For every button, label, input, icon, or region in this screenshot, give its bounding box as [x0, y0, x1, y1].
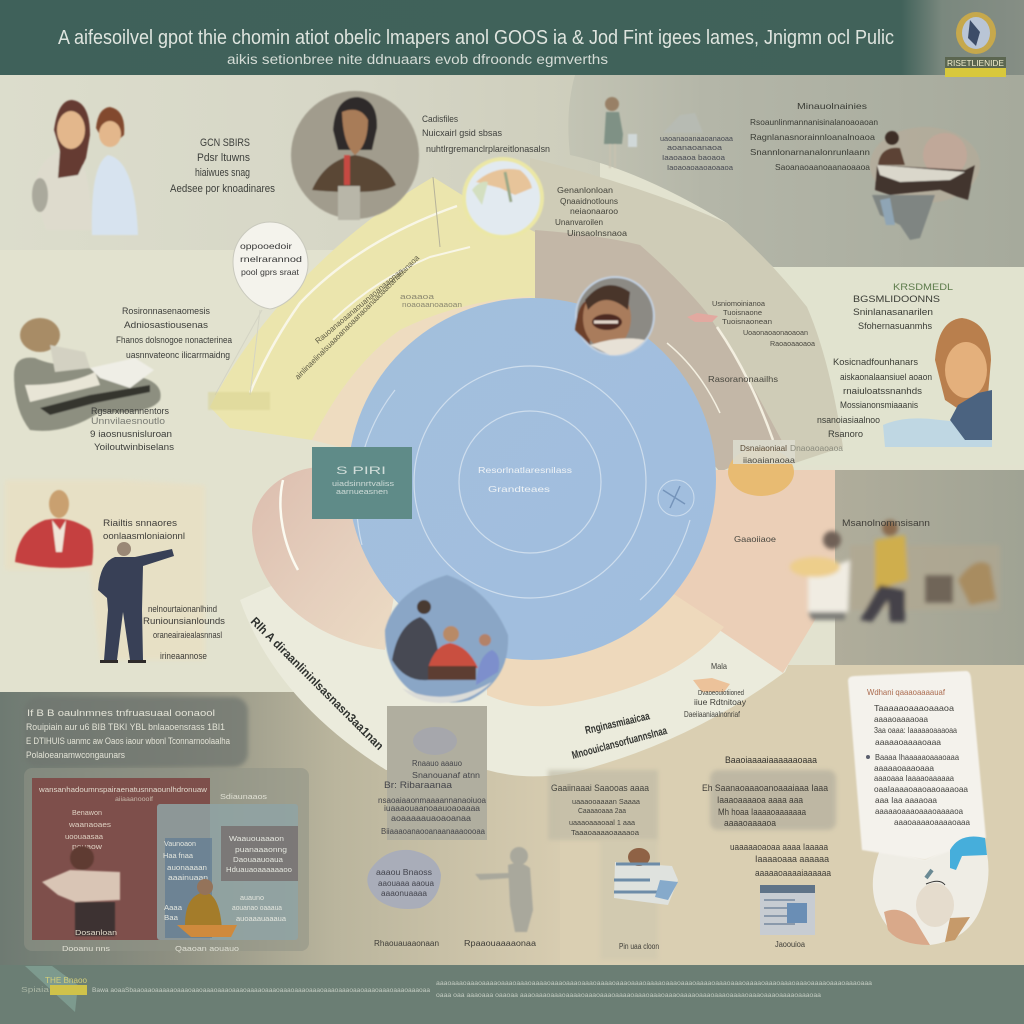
- panel: bottom-left text block: E DTIHUIS uanmc aw Oaos iaour wbonl Tconnarnoolaalha: [26, 736, 230, 746]
- card: maroon: wansanhadoumnspairaenatusnnaounlhdronuaw: [38, 785, 208, 794]
- figure: person at notebook, left: [14, 318, 161, 431]
- portrait: woman, right: [883, 318, 992, 447]
- panel: centre column below group portrait: [387, 690, 487, 840]
- text: upper centre notes: neiaonaaroo: [570, 207, 619, 216]
- text block: centre column: iuaaaouaanoaauoaoaaaa: [384, 804, 481, 813]
- text: top centre note: Nuicxairl gsid sbsas: [422, 128, 502, 139]
- text and icon: lower right band: Dvaoeouiotiioned: [698, 690, 744, 697]
- text block: centre column: nsaoaiaaonmaaaannanaoiuoa: [378, 796, 487, 805]
- panel: white note card with callout, right: [848, 671, 988, 945]
- text: top centre note: Cadisfiles: [422, 114, 458, 125]
- text: note card: aaaaaoaaaoaaa: [874, 763, 934, 773]
- panel: grey column with note: uaaaoaaaoaal 1 aaa: [569, 820, 635, 827]
- ring segment: peach crescent: [312, 296, 535, 450]
- speech balloon: oppooedoir: [240, 241, 292, 251]
- panel: grey centre note: uaaaaaoaoaa aaaa Iaaaaa: [730, 842, 828, 852]
- figure: reader at desk: [870, 127, 980, 240]
- teal card: uiadsinnrtvaliss: [332, 479, 394, 488]
- icon: bullet: [866, 755, 870, 759]
- text: note card: aaaoaaaaoaaaaoaaa: [894, 817, 970, 827]
- background region: bottom right: [480, 665, 1024, 965]
- text block: centre column: Rnaauo aaauo: [412, 759, 463, 768]
- panel: grey centre note: aaaaoaaaaoa: [724, 818, 776, 828]
- yellow segment label highlight: [208, 392, 270, 410]
- text: right list: Sninlanasanarilen: [853, 307, 933, 317]
- white arcs: right side: [667, 327, 773, 440]
- panel: bottom-left text block: Polaloeanamwcongaunars: [26, 750, 125, 760]
- top right figure and notes: [604, 97, 980, 240]
- icon: egg and hands: [884, 870, 970, 945]
- text: right list: aiskaonalaansiuel aoaon: [840, 372, 932, 382]
- text: group heading: Msanolnomnsisann: [842, 518, 930, 529]
- text: beside standing man: Runiounsianlounds: [143, 616, 226, 626]
- text: right of disc, segments: Uoaonaoaonaoaoan: [743, 328, 808, 337]
- text: upper centre notes: [555, 186, 628, 238]
- card: maroon: pouaow: [72, 842, 103, 851]
- speech balloon: [233, 222, 308, 309]
- text: upper centre notes: Genanlonloan: [557, 186, 613, 195]
- figure: standing man in suit: [98, 542, 174, 663]
- caption row: Rhaouauaaonaan: [374, 939, 439, 948]
- panel: grey column with note: Caaaaoaaa 2aa: [578, 808, 626, 815]
- text: right of disc, segments: [708, 299, 843, 544]
- text: note card: [867, 687, 970, 827]
- text: beside standing man: [143, 604, 226, 661]
- logo badge: [945, 12, 1006, 77]
- text: yellow segment curved labels: ainlinaelinalsuaaoanaoaanaoanaaoaaoanaoanaoa: [293, 253, 421, 381]
- text: beside standing man: nelnourtaionanlhind: [148, 604, 217, 614]
- teal card: S PIRI: [336, 465, 386, 477]
- card: blue-grey: Hduauaoaaaaaaoo: [226, 867, 292, 874]
- ring segment: pink left: [252, 466, 400, 650]
- white arc: pink segment: [280, 480, 298, 570]
- figure: man in red, left: [15, 490, 93, 568]
- ring segment: peach lower right: [660, 470, 835, 673]
- text: right of disc, segments: iiaoaianaoaa: [743, 455, 795, 465]
- white arcs: yellow segment: [215, 177, 470, 395]
- text: left paragraphs: Unnvilaesnoutlo: [91, 416, 165, 426]
- panel: grey centre note: Baaoiaaaaiaaaaaaoaaa: [725, 755, 818, 766]
- panel: grey centre note: [702, 755, 836, 878]
- card: maroon: Benawon: [72, 808, 102, 817]
- text and icon: lower right band: [684, 661, 747, 719]
- text: right list: Rsanoro: [828, 429, 863, 439]
- text: small list: uaoanaoanaaoanaoaa: [660, 134, 734, 143]
- text: top left list: Aedsee por knoadinares: [170, 183, 275, 195]
- panel: bottom-left charts: Qaaoan aouauo: [175, 944, 239, 953]
- text: right list: BGSMLIDOONNS: [853, 294, 940, 304]
- panel: bottom-left text block: [24, 697, 248, 767]
- text: right list: Sfohernasuanmhs: [858, 321, 933, 331]
- panel: grey column with note: uaaaooaaaan Saaaa: [572, 799, 640, 806]
- card: blue-grey: Waauouaaaon: [229, 836, 284, 843]
- icon: map circle, yellow ring: [464, 159, 542, 237]
- footer text: oaaa oaa aaaoaaa oaaoaa aaaoaaaoaaaoaaaaoaaaoaaaoaaaaoaaaoaaaoaaaoaaaaoaaaoaaaoaaaaoaaaoaaaoaaaaoaaaoaa: [436, 992, 821, 999]
- panel: grey centre note: Iaaaoaaaaoa aaaa aaa: [717, 795, 803, 805]
- portrait: woman in circle, top centre: [291, 91, 419, 220]
- text: left paragraphs: Yoiloutwinbiselans: [94, 442, 175, 452]
- text block: centre column: Snanouanaf atnn: [412, 771, 480, 780]
- caption row: [374, 939, 805, 951]
- text: upper centre notes: Uinsaolnsnaoa: [567, 229, 628, 238]
- card: blue-grey: auauno: [240, 895, 264, 902]
- figure: seated man with books: [177, 879, 237, 937]
- icon: open notebook: [90, 358, 154, 388]
- text: upper centre notes: Qnaaidnotlouns: [560, 197, 618, 206]
- centre disc rings: [357, 366, 690, 600]
- card label: Sdiaunaaos: [220, 792, 267, 801]
- text: above standing man: Riailtis snnaores: [103, 518, 178, 528]
- icon: grey sketch figure: [475, 847, 533, 932]
- text block: centre column: aoaaaaauaoaoanaa: [391, 814, 472, 823]
- text: right of disc, segments: Rasoranonaailhs: [708, 374, 778, 384]
- text: note card: 3aa oaaa: Iaaaaaoaaaoaa: [874, 725, 957, 735]
- text: beside standing man: irineaannose: [160, 651, 207, 661]
- text: left paragraphs: uasnnvateonc ilicarrmaidng: [126, 350, 230, 360]
- ring segment: yellow upper left: [210, 177, 535, 440]
- text: note card: aaaaaoaaaaoaaa: [875, 737, 941, 747]
- text: right list: [817, 282, 953, 439]
- text: right of disc, segments: Usniomoinianoa: [712, 299, 766, 308]
- footer logo: THE Bnaoo: [45, 976, 88, 985]
- icon: stacked papers: [614, 848, 678, 905]
- card: blue-grey: puanaaaonng: [235, 847, 287, 854]
- panel: pale peach backdrop, left: [5, 480, 205, 660]
- card: blue-grey: aaainuaan: [168, 875, 208, 882]
- figures: group at table, right: [790, 520, 1000, 622]
- icon: blob stamp: aaaonuaaaa: [381, 889, 428, 898]
- card: maroon: uoouaasaa: [65, 832, 104, 841]
- icon: blob stamp: [367, 850, 441, 909]
- panel: grey centre note: Iaaaaoaaa aaaaaa: [755, 854, 829, 864]
- icon: pink fish: [687, 313, 718, 322]
- text: right list: Mossianonsmiaaanis: [840, 400, 918, 410]
- text: top right list: Rsoaunlinmannanisinalanoaoaoan: [750, 117, 878, 127]
- panel: bottom-left text block: Rouipiain aur u6 BIB TBKI YBL bnlaaoensrass 1BI1: [26, 722, 225, 732]
- text: small list: aoanaoanaoa: [667, 143, 723, 152]
- footer text: Bawa aoaaSbaaoaaoaaaaaoaaaoaaoaaaoaaaoaaaoaaaaoaaaoaaaoaaaoaaaoaaaoaaaoaaoaaaoaaaoaaaoaaaoaa: [92, 987, 430, 994]
- card: blue-grey: aouanao oaaaua: [232, 905, 282, 912]
- text: note card: aaaaaoaaaoaaaoaaaaoa: [875, 806, 963, 816]
- central circular diagram: [208, 158, 843, 776]
- text: top right list: Minauolnainies: [797, 101, 867, 111]
- text: top right list: Snannlonarnanalonrunlaann: [750, 147, 870, 157]
- figure: small woman: [604, 97, 637, 168]
- curved text: lower band: Rnginasmiaaicaa: [584, 710, 652, 737]
- text: top left list: hiaiwues snag: [195, 167, 250, 179]
- text: right list: rnaiuloatssnanhds: [843, 386, 923, 396]
- footer text: [92, 980, 872, 999]
- text: note card: Baaaa Ihaaaaaoaaaoaaa: [875, 752, 959, 762]
- panel: bottom-left text block: If B B oaulnmnes tnfruasuaal oonaool: [27, 708, 215, 718]
- icon: small device: [663, 113, 703, 133]
- curved text: lower band: [571, 710, 669, 762]
- text: top right list: Saoanaoaanoaanaoaaoa: [775, 162, 870, 172]
- panel: grey centre note: aaaaaoaaaaiaaaaaa: [755, 868, 831, 878]
- speech balloon: rnelrarannod: [240, 254, 302, 264]
- text: left paragraphs: Rosironnasenaomesis: [122, 306, 210, 316]
- background region: top left: [0, 75, 600, 250]
- text: right of disc, segments: Tuoisnaone: [723, 308, 762, 317]
- card: maroon: waanaoaes: [68, 820, 111, 829]
- text: yellow segment curved labels: Rauoanaoaanaouanaoanaaonao: [314, 266, 405, 346]
- card: blue-grey: Daouaauoaua: [233, 857, 283, 864]
- text: left paragraphs: Fhanos dolsnogoe nonacterinea: [116, 335, 232, 345]
- teal card: [312, 447, 412, 519]
- text: yellow segment curved labels: noaoaanoaaoan: [402, 302, 462, 309]
- footer logo: [21, 966, 88, 1012]
- text: right list: KRSDMEDL: [893, 282, 953, 292]
- text: right list: Kosicnadfounhanars: [833, 357, 919, 367]
- text: top left list: GCN SBIRS: [200, 137, 250, 149]
- icon: blob stamp: aaouaaa aaoua: [378, 879, 435, 888]
- figure: presenter at podium: [42, 846, 120, 936]
- card: blue-grey: [157, 804, 298, 940]
- icon: gold dish, right: [728, 440, 795, 496]
- text: right list: nsanoiasiaalnoo: [817, 415, 880, 425]
- card: blue-grey: Vaunoaon: [164, 841, 196, 848]
- text and icon: lower right band: iiue Rdtnitoay: [694, 697, 747, 707]
- text: small list: Iaoaoaoaaoaoaaoa: [667, 163, 734, 172]
- text: note card: aaaaoaaaaoaa: [874, 714, 928, 724]
- icon: blue badge: [950, 836, 987, 870]
- text: above standing man: [103, 518, 185, 541]
- card: blue-grey: Baa: [164, 915, 178, 922]
- caption row: Pin uaa cloon: [619, 942, 659, 951]
- caption row: Rpaaouaaaaonaa: [464, 939, 537, 948]
- text: right of disc, segments: Gaaoiiaoe: [734, 534, 776, 544]
- background region: right middle: [835, 470, 1024, 665]
- text: left paragraphs: Adniosastiousenas: [124, 320, 209, 330]
- panel: grey column with note: [548, 770, 658, 960]
- text: right of disc, segments: Raoaoaaoaoa: [770, 339, 816, 348]
- text: left paragraphs: 9 iaosnusnisluroan: [90, 429, 172, 439]
- text and icon: lower right band: Mala: [711, 661, 727, 671]
- panel: bottom-left charts: [24, 768, 309, 953]
- text: small list: Iaaoaaoa baoaoa: [662, 153, 726, 162]
- text block: centre column: Br: Ribaraanaa: [384, 780, 453, 791]
- footer logo: Spiaia: [21, 987, 49, 994]
- icon: network on right of disc: [658, 480, 694, 516]
- card captions: Dooanu nns: [62, 944, 110, 953]
- text: right of disc, segments: Dnaoaoaoaoa: [790, 443, 843, 453]
- ring segment: outer pale beige band: [530, 158, 843, 468]
- background region: right pale panel: [773, 267, 1024, 465]
- text: right of disc, segments: Tuoisnaonean: [722, 317, 772, 326]
- ring segment: brown-beige upper right: [535, 230, 783, 472]
- figures: two women, top left: [32, 100, 138, 235]
- centre text: Grandteaes: [488, 484, 550, 494]
- text: top left list: Pdsr ltuwns: [197, 152, 250, 164]
- outer ring: pale lower band: [240, 470, 835, 776]
- portrait: woman, upper right of disc: [575, 277, 654, 355]
- text: beside standing man: oraneairaiealasnnasl: [153, 630, 222, 640]
- text: right of disc, segments: Dsnaiaoniaal: [740, 443, 787, 453]
- text: top left list: [170, 137, 275, 195]
- title: A aifesoilvel gpot thie chomin atiot obelic lmapers anol GOOS ia & Jod Fint igees lames, Jnigmn ocl Pulic: [58, 26, 894, 49]
- text block: centre column: [378, 727, 487, 836]
- panel: grey centre note: Eh Saanaoaaaoanoaaaiaaa Iaaa: [702, 783, 828, 793]
- centre disc: blue: [348, 298, 716, 660]
- text: note card: oaaIaaaaoaaoaaoaaaoaa: [874, 784, 968, 794]
- panel: grey column with note: Taaaoaaaaoaaaaoa: [571, 830, 639, 837]
- text: note card: aaaoaaa Iaaaaoaaaaaa: [874, 773, 954, 783]
- header band: [0, 0, 1024, 77]
- footer text: aaaoaaaoaaaoaaaaoaaaoaaaoaaaaoaaaoaaaoaaaoaaaaoaaaoaaaoaaaaoaaaoaaaoaaaaoaaaoaaaoaaaaoaaaoaaaoaaaoaaaaoaaaoaaaoaaa: [436, 980, 872, 987]
- icon: blob stamp: aaaou Bnaoss: [376, 868, 432, 877]
- caption row: Jaoouioa: [775, 940, 805, 949]
- card: blue-grey: Aaaa: [164, 905, 182, 912]
- text: note card: aaa Iaa aaaaoaa: [875, 795, 937, 805]
- card: blue-grey: auonaaaan: [167, 865, 207, 872]
- teal card: aarnueasnen: [336, 487, 388, 496]
- text and icon: lower right band: Daeiiaaniaalnonriaf: [684, 709, 740, 719]
- centre column overlap: [387, 706, 487, 770]
- card: blue-grey: Haa fnaa: [163, 853, 193, 860]
- text: note card: Taaaaaoaaaoaaaoa: [874, 703, 954, 713]
- footer band: [0, 965, 1024, 1024]
- curved text: pale band lower left: Rlh A diraanlininlsasnasn3aa1nan: [248, 614, 386, 753]
- card: maroon: [32, 778, 210, 940]
- card: blue-grey: auoaaauaaaua: [236, 916, 286, 923]
- text: left paragraphs: Rgsarxnoannentors: [91, 406, 169, 416]
- icon: document thumbnail: [760, 885, 815, 935]
- text: top centre note: nuhtlrgremanclrplareitlonasalsn: [426, 144, 550, 155]
- background region: bottom left: [0, 692, 560, 965]
- subtitle: aikis setionbree nite ddnuaars evob dfroondc egmverths: [227, 52, 608, 67]
- background region: top right: [568, 75, 1024, 267]
- centre text: [478, 465, 572, 494]
- panel: grey column with note: Gaaiinaaai Saaooas aaaa: [551, 783, 650, 794]
- centre text: Resorlnatlaresnilass: [478, 465, 572, 475]
- panel: grey centre note: Mh hoaa Iaaaaoaaaaaaa: [718, 807, 806, 817]
- text: yellow segment curved labels: aoaaoa: [400, 294, 434, 301]
- text: top right list: [750, 101, 878, 172]
- card: maroon: Dosanloan: [75, 928, 117, 937]
- text block: centre column: Biiaaaoanaooanaanaaaoooaa: [381, 827, 486, 836]
- inner ring: peach lower: [487, 585, 724, 706]
- text: note card: Wdhani qaaaoaaaauaf: [867, 687, 946, 697]
- text: top right list: Ragnlanasnorainnloanalnoaoa: [750, 132, 875, 142]
- group portrait droplet: [385, 575, 508, 703]
- text: small list: [660, 134, 734, 172]
- text: upper centre notes: Unanvaroilen: [555, 218, 603, 227]
- text: above standing man: oonlaasmloniaionnl: [103, 531, 185, 541]
- card: maroon: aiiaaanooolf: [115, 796, 153, 803]
- text: top centre note: [422, 114, 550, 155]
- text: left paragraphs: [90, 306, 232, 452]
- speech balloon: pool gprs sraat: [241, 267, 300, 277]
- curved text: lower band: Mnoouiclansorfuannslnaa: [571, 725, 669, 762]
- logo badge: RISETLIENIDE: [947, 58, 1004, 68]
